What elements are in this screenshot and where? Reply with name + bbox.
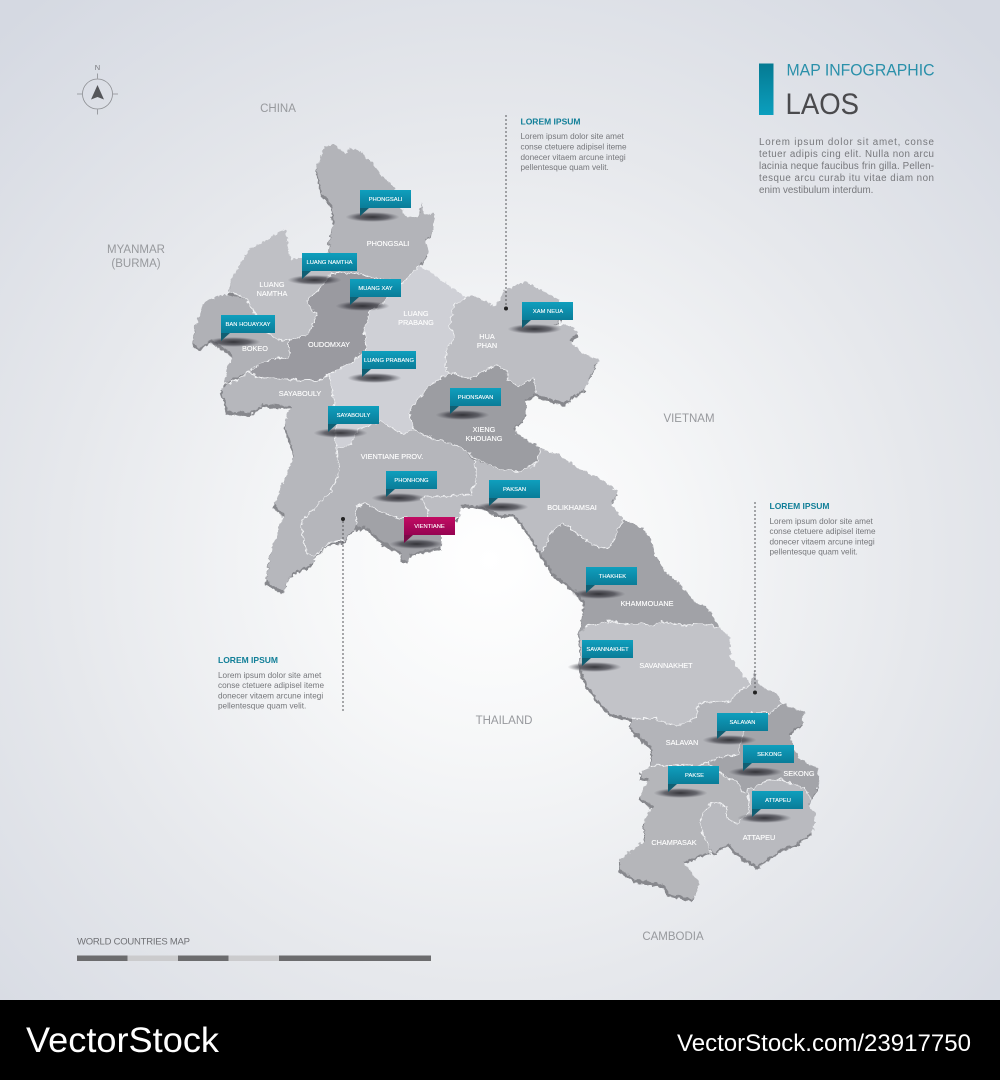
region: Khammouane xyxy=(540,518,718,637)
marker: Muang Xay xyxy=(336,279,401,311)
callout text: east: Lorem ipsum dolor site amet xyxy=(770,517,874,526)
marker: Phongsali: PHONGSALI xyxy=(369,197,403,203)
region labels: BOKEO xyxy=(242,344,268,353)
callout text: west: conse ctetuere adipisel iteme xyxy=(218,681,324,690)
region: Vientiane Province xyxy=(300,420,475,555)
marker: Salavan xyxy=(702,713,768,745)
region labels: VIENTIANE PROV. xyxy=(361,452,423,461)
title block xyxy=(759,62,935,121)
country label: Thailand: THAILAND xyxy=(476,715,532,727)
marker: Muang Xay: MUANG XAY xyxy=(358,286,393,292)
title block: MAP INFOGRAPHIC xyxy=(786,62,935,80)
callout text: east: pellentesque quam velit. xyxy=(770,548,858,556)
intro paragraph: enim vestibulum interdum. xyxy=(759,185,873,196)
region labels: SAVANNAKHET xyxy=(639,661,693,670)
intro paragraph: Lorem ipsum dolor sit amet, conse xyxy=(759,137,935,148)
region: Luang Prabang xyxy=(327,265,465,448)
marker: Savannakhet xyxy=(568,640,633,672)
country label: Vietnam: VIETNAM xyxy=(663,413,715,425)
region labels: XIENG xyxy=(473,425,496,434)
region: Champasak xyxy=(618,760,747,898)
marker: Luang Prabang xyxy=(348,351,416,383)
marker: Sekong xyxy=(728,745,794,777)
region labels: NAMTHA xyxy=(257,289,288,298)
footer bar xyxy=(0,1000,1000,1080)
marker: Luang Namtha xyxy=(288,253,357,285)
region: Bolikhamsai xyxy=(420,447,622,552)
callout: east leader line xyxy=(753,502,757,694)
region labels: HUA xyxy=(479,332,495,341)
region: Attapeu xyxy=(698,778,815,865)
marker: Phonhong xyxy=(372,471,437,503)
callout text: east: donecer vitaem arcune integi xyxy=(770,538,875,546)
marker: Sayabouly xyxy=(314,406,379,438)
marker: Phonsavan xyxy=(436,388,501,420)
country label: Myanmar: (BURMA) xyxy=(111,258,161,270)
callout text: north xyxy=(520,116,627,172)
map of Laos xyxy=(192,143,818,898)
marker: Pakse: PAKSE xyxy=(685,773,704,779)
marker: Thakhek xyxy=(572,567,637,599)
watermark url: VectorStock.com/23917750 xyxy=(677,1030,971,1057)
region: Vientiane xyxy=(355,503,440,560)
region: Salavan xyxy=(630,670,780,767)
callout text: east: conse ctetuere adipisel iteme xyxy=(770,527,876,536)
region: Savannakhet xyxy=(578,620,750,725)
scale bar xyxy=(77,956,431,961)
marker: Xam Neua: XAM NEUA xyxy=(533,309,563,315)
callout text: north: Lorem ipsum dolor site amet xyxy=(520,132,625,141)
region: Sayabouly xyxy=(220,370,338,590)
region: Luang Namtha xyxy=(227,228,330,339)
region labels: CHAMPASAK xyxy=(651,838,697,847)
marker: Sekong: SEKONG xyxy=(757,752,782,758)
marker: Pakse xyxy=(654,766,719,798)
country label: Myanmar: MYANMAR xyxy=(107,244,165,256)
scale label: WORLD COUNTRIES MAP xyxy=(77,936,190,948)
region: Xieng Khouang xyxy=(407,363,540,470)
intro paragraph: tetuer adipis cing elit. Nulla non arcu xyxy=(759,149,934,160)
marker: Attapeu: ATTAPEU xyxy=(765,798,791,804)
region labels: SALAVAN xyxy=(666,738,698,747)
compass xyxy=(77,63,118,114)
marker: Sayabouly: SAYABOULY xyxy=(337,413,371,419)
marker: Ban Houayxay: BAN HOUAYXAY xyxy=(226,322,271,328)
marker: Vientiane (capital) xyxy=(390,517,455,549)
intro paragraph xyxy=(759,137,935,196)
region labels xyxy=(242,239,815,847)
intro paragraph: lacinia neque faucibus frin gilla. Pellen- xyxy=(759,161,934,172)
title block: LAOS xyxy=(786,88,859,121)
region labels: ATTAPEU xyxy=(743,833,775,842)
region labels: SAYABOULY xyxy=(279,389,321,398)
region labels: KHOUANG xyxy=(466,434,503,443)
region: Phongsali xyxy=(315,143,433,282)
region labels: OUDOMXAY xyxy=(308,340,350,349)
marker: Xam Neua xyxy=(508,302,573,334)
marker: Vientiane (capital): VIENTIANE xyxy=(414,524,445,530)
callout text: west: LOREM IPSUM xyxy=(218,655,278,665)
marker: Paksan: PAKSAN xyxy=(503,487,526,493)
callout text: north: pellentesque quam velit. xyxy=(520,163,609,172)
intro paragraph: tesque arcu curab itu vitae diam non xyxy=(759,173,934,184)
marker: Attapeu xyxy=(738,791,803,823)
region labels: KHAMMOUANE xyxy=(620,599,674,608)
watermark logo: VectorStock xyxy=(26,1021,220,1060)
country label: Cambodia: CAMBODIA xyxy=(642,931,704,943)
callout: west leader line xyxy=(341,517,345,712)
region labels: SEKONG xyxy=(783,769,815,778)
compass: N xyxy=(95,63,100,72)
callout text: north: donecer vitaem arcune integi xyxy=(520,153,626,162)
marker: Phonhong: PHONHONG xyxy=(394,478,429,484)
marker: Paksan xyxy=(474,480,540,512)
callout text: west: pellentesque quam velit. xyxy=(218,702,306,710)
region labels: PRABANG xyxy=(398,318,434,327)
callout text: east: LOREM IPSUM xyxy=(770,501,829,511)
region labels: BOLIKHAMSAI xyxy=(547,503,597,512)
region labels: LUANG xyxy=(259,280,285,289)
region labels: PHAN xyxy=(477,341,497,350)
marker: Luang Prabang: LUANG PRABANG xyxy=(364,358,414,364)
region: Bokeo xyxy=(192,293,288,383)
region labels: PHONGSALI xyxy=(367,239,409,248)
marker: Thakhek: THAKHEK xyxy=(599,574,626,580)
callout text: west: Lorem ipsum dolor site amet xyxy=(218,671,322,680)
marker: Phonsavan: PHONSAVAN xyxy=(458,395,493,401)
region: Oudomxay xyxy=(247,272,400,380)
country label: China: CHINA xyxy=(260,103,296,115)
callout text: east xyxy=(770,501,876,556)
region labels: LUANG xyxy=(403,309,429,318)
region: Hua Phan xyxy=(445,280,598,402)
marker: Savannakhet: SAVANNAKHET xyxy=(586,647,629,653)
marker: Phongsali xyxy=(346,190,411,222)
callout text: north: LOREM IPSUM xyxy=(520,116,580,126)
callout text: west xyxy=(218,655,324,710)
callout text: north: conse ctetuere adipisel iteme xyxy=(520,142,627,152)
marker: Luang Namtha: LUANG NAMTHA xyxy=(306,260,353,266)
marker: Ban Houayxay xyxy=(206,315,275,347)
callout: north leader line xyxy=(504,115,508,310)
region: Sekong xyxy=(707,702,818,802)
callout text: west: donecer vitaem arcune integi xyxy=(218,692,323,700)
marker: Salavan: SALAVAN xyxy=(730,720,755,726)
